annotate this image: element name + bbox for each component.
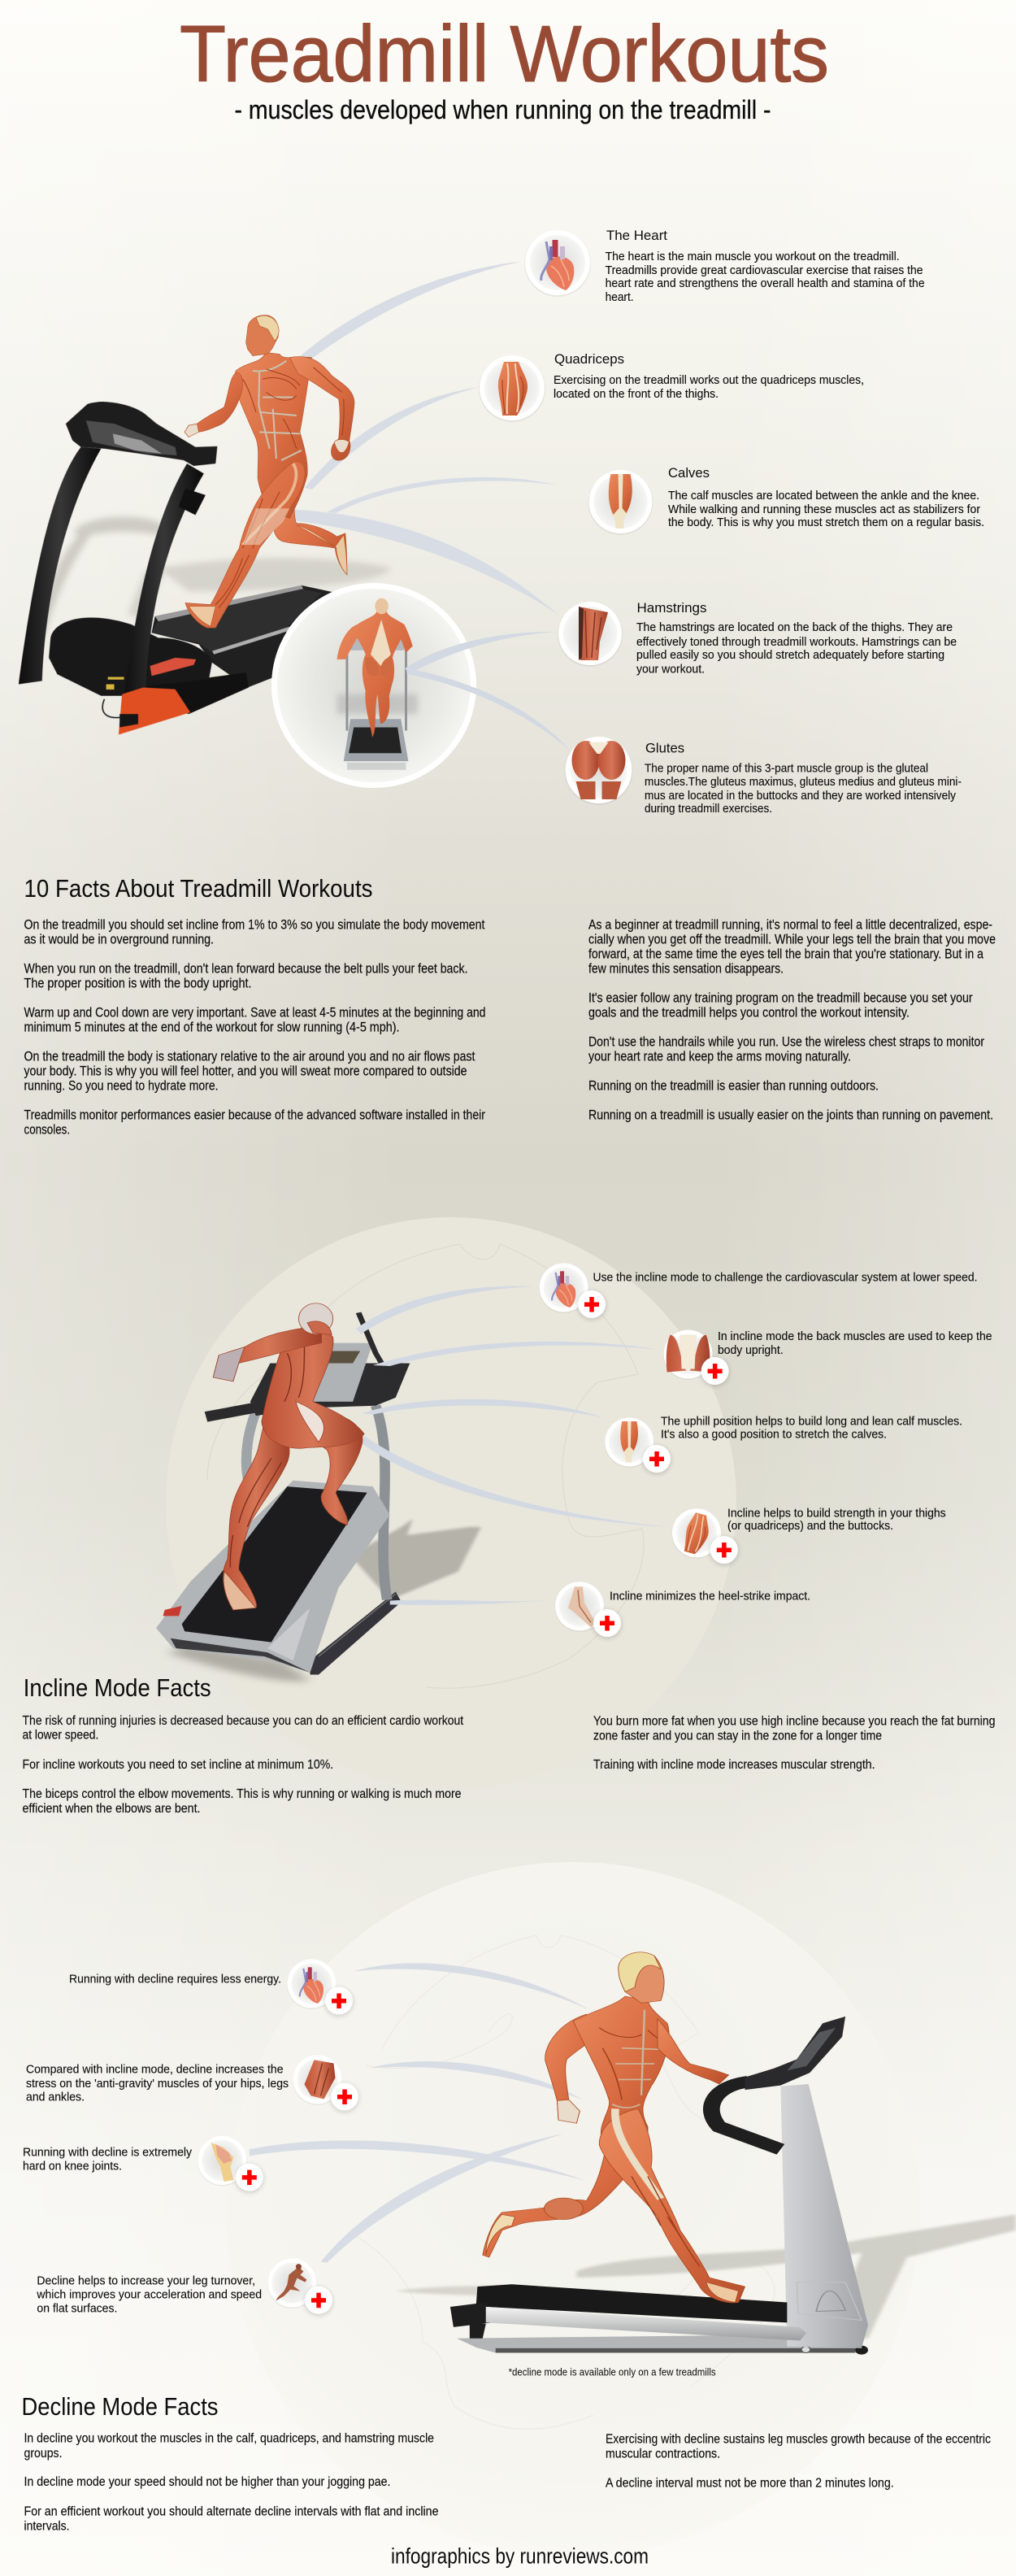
console (66, 402, 217, 466)
illustration: runner on dark treadmill (19, 402, 391, 734)
front leg (599, 2108, 745, 2303)
plus badge (701, 1357, 730, 1387)
head (246, 315, 279, 356)
body: the heart: heart. (606, 290, 634, 304)
body: glutes: muscles.The gluteus maximus, gluteus medius and gluteus mini- (645, 775, 962, 789)
plus badge (235, 2164, 264, 2193)
decline facts: left column (24, 2432, 439, 2534)
illustration: decline treadmill and runner (395, 2017, 1016, 2355)
callout: incline heel strike (554, 1582, 810, 1639)
text: In incline mode the back muscles are used to keep the (718, 1329, 992, 1343)
facts: right column: your heart rate and keep the arms moving naturally. (588, 1050, 851, 1064)
facts: left column: consoles. (24, 1123, 70, 1138)
head (619, 1953, 664, 2003)
text: The uphill position helps to build long and lean calf muscles. (661, 1415, 962, 1429)
facts: right column (588, 918, 996, 1123)
base (457, 2334, 868, 2352)
incline facts: left column: For incline workouts you need to set incline at minimum 10%. (23, 1758, 333, 1772)
console (745, 2017, 845, 2090)
body: the heart (606, 250, 925, 304)
icon: calves (588, 470, 653, 535)
icon: calf with plus (605, 1418, 654, 1468)
heading: the heart: The Heart (606, 228, 667, 243)
facts: left column: On the treadmill you should set incline from 1% to 3% so you simulate the body movement (24, 918, 485, 933)
icon: heart with plus (539, 1264, 588, 1313)
text (26, 2063, 289, 2104)
lower side rail (145, 672, 249, 714)
callout: quadriceps (479, 351, 864, 422)
console (250, 1363, 410, 1416)
text: It's also a good position to stretch the calves. (661, 1428, 887, 1441)
right arm (658, 2019, 729, 2084)
text (36, 2274, 262, 2316)
treadmill shadow (350, 1519, 481, 1599)
right upright (123, 463, 204, 704)
text: body upright. (718, 1343, 784, 1357)
facts: left column: your body. This is why you will feel hotter, and you will sweat more compared to outside (24, 1064, 467, 1079)
callout: the heart (524, 228, 925, 304)
callout: calves (588, 465, 984, 535)
facts: right column: few minutes this sensation disappears. (588, 962, 784, 977)
body: the heart: Treadmills provide great cardiovascular exercise that raises the (606, 263, 923, 277)
icon: heart (524, 230, 591, 297)
icon: back with plus (663, 1330, 713, 1380)
deck top (476, 2284, 787, 2322)
facts: left column: Warm up and Cool down are very important. Save at least 4-5 minutes at the beginning and (24, 1006, 486, 1020)
silver rail (486, 2307, 806, 2341)
callout: decline leg turnover (36, 2259, 333, 2316)
rear view inset circle (271, 583, 476, 788)
callout: incline back muscles (663, 1329, 992, 1387)
text: stress on the 'anti-gravity' muscles of your hips, legs (26, 2077, 289, 2091)
facts: left column: On the treadmill the body is stationary relative to the air around you and no air flows past (24, 1050, 475, 1064)
text: Running with decline requires less energy. (69, 1972, 281, 1986)
plus badge (330, 2083, 359, 2113)
heading: hamstrings: Hamstrings (637, 600, 707, 616)
footnote: *decline mode is available only on a few treadmills (509, 2366, 716, 2378)
heading: quadriceps: Quadriceps (554, 351, 624, 367)
rear leg (483, 2149, 624, 2257)
decline facts: left column: In decline you workout the muscles in the calf, quadriceps, and hamstring muscle (24, 2432, 434, 2446)
front end (450, 2302, 493, 2327)
decline facts: right column (606, 2433, 991, 2490)
incline facts: left column: The biceps control the elbow movements. This is why running or walking is much more (23, 1787, 462, 1801)
body: calves: While walking and running these muscles act as stabilizers for (668, 503, 980, 516)
front leg (185, 462, 305, 628)
body: glutes: mus are located in the buttocks and they are worked intensively (645, 789, 956, 803)
body: hamstrings: effectively toned through treadmill workouts. Hamstrings can be (636, 635, 957, 649)
icon: quadriceps (479, 355, 545, 422)
facts: left column: When you run on the treadmill, don't lean forward because the belt pulls your feet back. (24, 962, 468, 977)
plus badge (593, 1609, 622, 1639)
body: quadriceps: located on the front of the thighs. (554, 387, 719, 401)
callout: glutes (564, 737, 962, 816)
body: quadriceps: Exercising on the treadmill works out the quadriceps muscles, (554, 373, 864, 387)
incline facts: left column (23, 1714, 464, 1816)
left upright (19, 447, 101, 684)
incline facts: left column: efficient when the elbows are bent. (23, 1802, 200, 1816)
decline facts: left column: intervals. (24, 2520, 70, 2534)
facts: left column: The proper position is with the body upright. (24, 977, 252, 991)
body: quadriceps (554, 373, 864, 401)
callout: hamstrings (558, 600, 957, 677)
callout: incline thighs (671, 1506, 946, 1566)
anatomical runner, front three-quarter view (483, 1952, 745, 2303)
incline facts: right column: zone faster and you can stay in the zone for a longer time (593, 1729, 882, 1743)
incline backdrop circle (166, 1217, 736, 1788)
rear frame (310, 1592, 402, 1674)
belt (182, 1486, 367, 1643)
callout: decline anti-gravity muscles (26, 2055, 359, 2113)
body: glutes: during treadmill exercises. (645, 802, 772, 816)
deck frame (156, 1481, 390, 1673)
decline facts: right column: muscular contractions. (606, 2447, 720, 2461)
upright (780, 2084, 868, 2348)
icon: hamstrings (558, 602, 623, 667)
plus badge (710, 1536, 739, 1566)
incline facts: right column: Training with incline mode increases muscular strength. (593, 1758, 875, 1772)
connector ribbons: decline (250, 1963, 589, 2263)
subtitle: - muscles developed when running on the treadmill - (234, 95, 771, 124)
icon: foot with plus (554, 1582, 605, 1632)
body: calves: the body. This is why you must stretch them on a regular basis. (668, 516, 984, 529)
title: Treadmill Workouts (180, 9, 829, 98)
connector ribbons to muscle callouts (292, 262, 558, 615)
illustration: incline treadmill and runner (156, 1312, 481, 1682)
decline facts: left column: For an efficient workout you should alternate decline intervals with flat and incline (24, 2504, 439, 2518)
text: Incline minimizes the heel-strike impact. (610, 1589, 810, 1603)
handlebar (711, 2082, 780, 2149)
heading: glutes: Glutes (645, 740, 684, 756)
text: which improves your acceleration and speed (36, 2288, 262, 2301)
text: Incline helps to build strength in your thighs (727, 1506, 946, 1521)
icon: hips with plus (293, 2055, 342, 2105)
facts: left column: running. So you need to hydrate more. (24, 1079, 218, 1094)
torso (573, 1996, 669, 2140)
inset: rear treadmill and runner (336, 598, 418, 770)
facts: left column: minimum 5 minutes at the end of the workout for slow running (4-5 mph). (24, 1020, 400, 1035)
torso (233, 352, 311, 518)
text (661, 1415, 962, 1441)
red base cap (119, 688, 190, 734)
facts: left column: as it would be in overground running. (24, 933, 214, 947)
decline facts: right column: A decline interval must not be more than 2 minutes long. (606, 2476, 894, 2490)
text (718, 1329, 992, 1357)
text: on flat surfaces. (37, 2302, 117, 2316)
text: Running with decline is extremely (23, 2145, 192, 2160)
right arm (289, 357, 354, 460)
anatomical runner, side view (185, 315, 354, 628)
callout: decline energy (69, 1960, 354, 2017)
section heading: incline mode facts: Incline Mode Facts (24, 1673, 211, 1702)
right upright (376, 1406, 387, 1599)
text: and ankles. (26, 2090, 85, 2104)
facts: right column: goals and the treadmill helps you control the workout intensity. (588, 1006, 910, 1020)
motor hood (49, 618, 212, 696)
incline facts: right column (593, 1714, 995, 1772)
decline facts: left column: groups. (24, 2447, 62, 2461)
connector ribbons from rear view (405, 632, 570, 751)
rear leg (273, 492, 347, 575)
section heading: decline mode facts: Decline Mode Facts (21, 2392, 218, 2421)
icon: glutes (564, 737, 633, 805)
icon: knee with plus (198, 2136, 247, 2186)
left arm (545, 2014, 599, 2123)
text (23, 2145, 192, 2174)
body: hamstrings: your workout. (636, 662, 705, 677)
body: glutes (645, 761, 962, 816)
plus badge (304, 2287, 333, 2316)
plus badge (324, 1987, 354, 2017)
text: Compared with incline mode, decline increases the (26, 2063, 283, 2077)
body: hamstrings: The hamstrings are located on the back of the thighs. They are (636, 620, 953, 634)
text: Use the incline mode to challenge the cardiovascular system at lower speed. (593, 1270, 977, 1285)
icon: heart with plus (287, 1960, 336, 2009)
footer credit: infographics by runreviews.com (391, 2543, 649, 2568)
text: Decline helps to increase your leg turnover, (37, 2274, 255, 2287)
text: (or quadriceps) and the buttocks. (727, 1519, 893, 1533)
body: hamstrings: pulled easily so you should stretch adequately before starting (636, 648, 944, 662)
body: glutes: The proper name of this 3-part muscle group is the gluteal (645, 761, 928, 776)
plus badge (642, 1445, 671, 1475)
body: the heart: The heart is the main muscle you workout on the treadmill. (606, 250, 900, 263)
treadmill shadow (576, 2215, 1016, 2339)
facts: left column: Treadmills monitor performances easier because of the advanced software installed in their (24, 1108, 485, 1123)
incline facts: left column: The risk of running injuries is decreased because you can do an efficient cardio workout (23, 1714, 464, 1728)
treadmill deck (152, 585, 336, 688)
heading: calves: Calves (668, 465, 710, 481)
text (727, 1506, 946, 1533)
body: calves: The calf muscles are located between the ankle and the knee. (668, 489, 979, 503)
callout: incline calves (605, 1415, 962, 1475)
decline backdrop circle (226, 1862, 920, 2556)
icon: runner with plus (267, 2259, 317, 2308)
incline facts: left column: at lower speed. (23, 1729, 98, 1743)
body: the heart: heart rate and strengthens the overall health and stamina of the (606, 276, 925, 290)
decline facts: left column: In decline mode your speed should not be higher than your jogging pae. (24, 2475, 390, 2489)
left upright (246, 1394, 264, 1482)
floor shadows (41, 517, 391, 637)
text: hard on knee joints. (23, 2160, 122, 2174)
body: calves (668, 489, 984, 529)
icon: thigh with plus (671, 1508, 722, 1559)
section heading: 10 facts: 10 Facts About Treadmill Workouts (24, 874, 372, 903)
body: hamstrings (636, 620, 957, 677)
callout: decline knee joints (23, 2136, 264, 2193)
facts: right column: Running on the treadmill is easier than running outdoors. (588, 1079, 879, 1094)
facts: left column (24, 918, 486, 1138)
left arm (185, 372, 243, 437)
connector ribbons: incline (356, 1286, 672, 1605)
callout: incline cardio (539, 1264, 977, 1321)
anatomical runner, rear view (213, 1303, 364, 1610)
plus badge (577, 1290, 606, 1321)
